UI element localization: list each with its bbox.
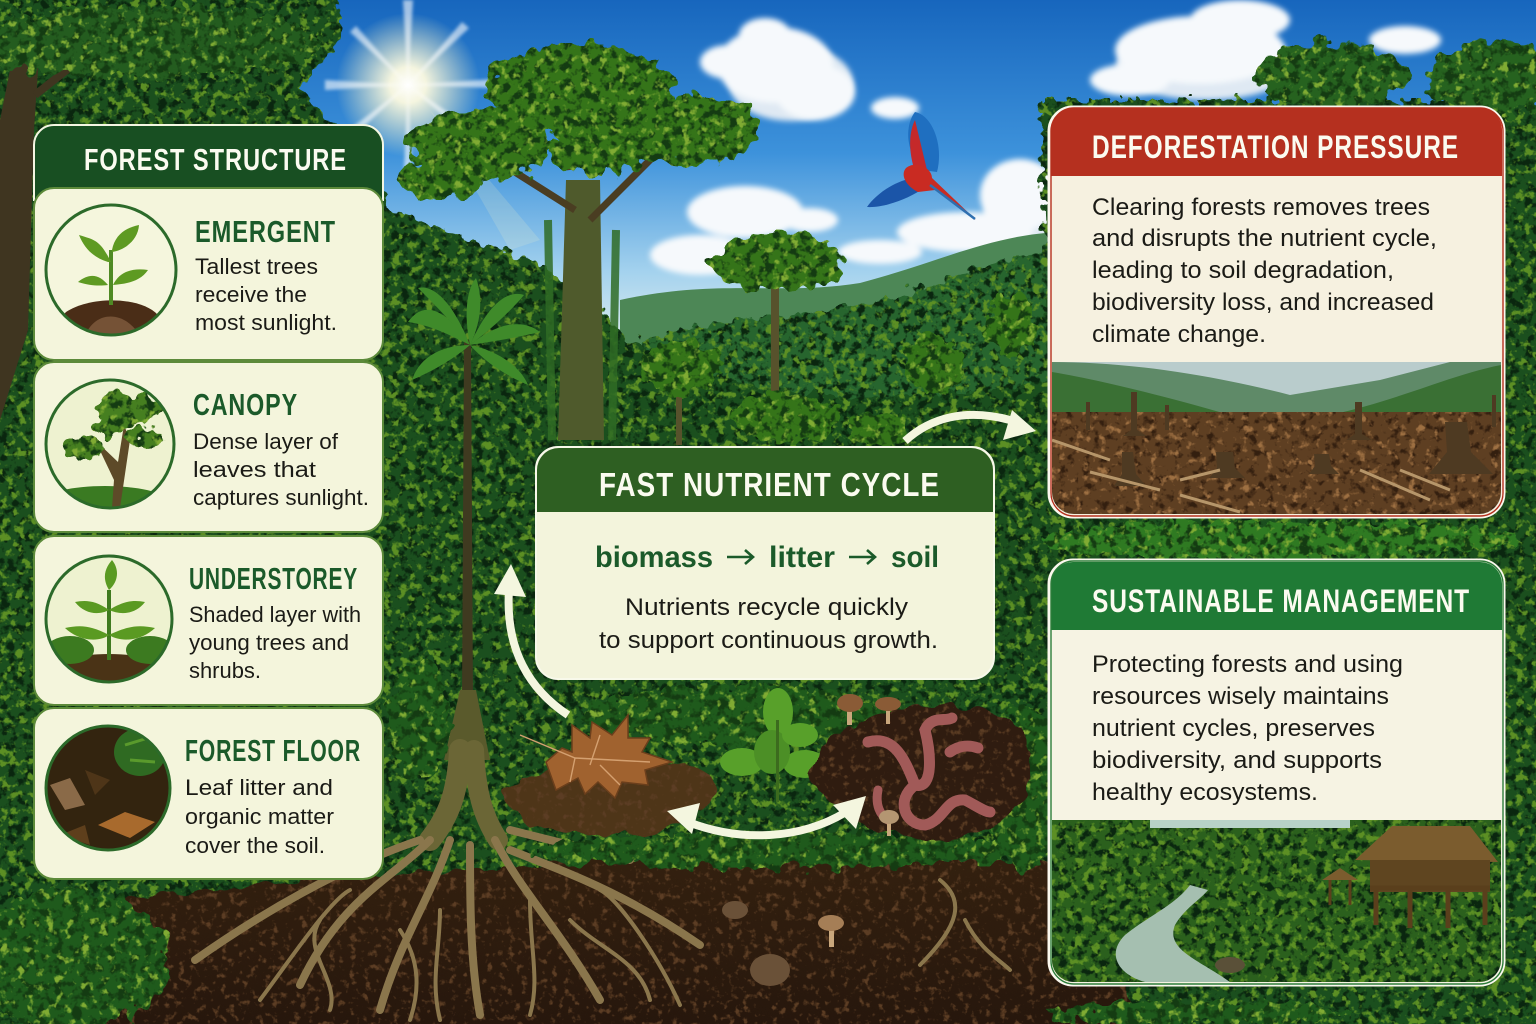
cycle description xyxy=(599,594,938,654)
sustainable text: biodiversity, and supports xyxy=(1092,747,1382,774)
tree roots xyxy=(195,750,1010,1020)
forest floor soil xyxy=(100,860,1130,1024)
deforestation text: climate change. xyxy=(1092,321,1266,348)
sun xyxy=(325,0,540,250)
cycle sequence: soil xyxy=(891,541,939,574)
canopy text: Dense layer of xyxy=(193,429,339,454)
clouds xyxy=(650,0,1441,275)
sustainable text xyxy=(1092,651,1403,806)
gap foliage between right panels xyxy=(1045,520,1525,560)
icon: mushrooms and stones xyxy=(722,694,901,986)
cycle sequence: biomass xyxy=(595,541,713,574)
sustainable text: healthy ecosystems. xyxy=(1092,779,1318,806)
heading: fast nutrient cycle: FAST NUTRIENT CYCLE xyxy=(599,466,940,503)
litter pile xyxy=(500,760,712,835)
canopy text: CANOPY xyxy=(193,387,298,422)
deforestation text xyxy=(1092,194,1437,348)
understorey text: shrubs. xyxy=(189,658,261,683)
icon: fallen leaf xyxy=(520,715,672,798)
panel: forest structure xyxy=(34,125,383,879)
heading: forest structure: FOREST STRUCTURE xyxy=(84,142,347,177)
panel: sustainable management xyxy=(1048,558,1506,986)
emergent text xyxy=(195,214,337,335)
forest floor text: FOREST FLOOR xyxy=(185,733,361,768)
icon: shrub circle xyxy=(46,556,174,690)
understorey text: Shaded layer with xyxy=(189,602,361,627)
deforestation text: and disrupts the nutrient cycle, xyxy=(1092,225,1437,252)
sustainable heading bar xyxy=(1051,562,1502,630)
mid-ground undergrowth xyxy=(0,660,1350,1024)
deforestation text: leading to soil degradation, xyxy=(1092,257,1394,284)
icon: tree circle xyxy=(45,380,174,514)
forest floor text xyxy=(185,733,361,858)
emergent text: receive the xyxy=(195,282,307,307)
forest floor text: Leaf litter and xyxy=(185,775,333,800)
forest floor text: cover the soil. xyxy=(185,833,325,858)
cycle description: Nutrients recycle quickly xyxy=(625,594,908,621)
cycle heading bar xyxy=(537,448,993,512)
canopy text xyxy=(193,387,369,510)
card: forest floor xyxy=(34,708,383,879)
icon: seedling xyxy=(720,688,827,802)
forest floor text: organic matter xyxy=(185,804,334,829)
forest structure heading bar xyxy=(34,125,383,200)
emergent text: EMERGENT xyxy=(195,214,336,249)
emergent text: most sunlight. xyxy=(195,310,337,335)
image: cleared forest xyxy=(1052,362,1501,514)
card: canopy xyxy=(34,362,383,532)
arrow: litter up to biomass xyxy=(494,564,568,715)
deforestation heading bar xyxy=(1051,108,1502,176)
big emergent tree xyxy=(400,44,758,440)
cycle sequence xyxy=(595,541,939,574)
emergent text: Tallest trees xyxy=(195,254,318,279)
understorey text: UNDERSTOREY xyxy=(189,561,358,596)
card: understorey xyxy=(34,536,383,705)
distant hills xyxy=(620,232,1060,480)
cycle description: to support continuous growth. xyxy=(599,627,938,654)
card: emergent xyxy=(34,188,383,360)
arrow: double headed litter and soil xyxy=(667,796,866,835)
canopy text: captures sunlight. xyxy=(193,485,369,510)
icon: earthworms xyxy=(868,718,990,825)
background: sky xyxy=(0,0,1536,340)
canopy text: leaves that xyxy=(193,457,316,482)
icon: seedling circle xyxy=(46,205,176,336)
parrot xyxy=(867,112,976,220)
sustainable text: nutrient cycles, preserves xyxy=(1092,715,1375,742)
icon: stilt hut xyxy=(1322,826,1498,928)
top left canopy and trunk xyxy=(0,6,320,420)
deforestation text: biodiversity loss, and increased xyxy=(1092,289,1434,316)
panel: fast nutrient cycle xyxy=(536,447,994,679)
soil mound xyxy=(810,705,1031,840)
small foreground trees xyxy=(640,232,1034,448)
panel: deforestation pressure xyxy=(1049,107,1504,517)
palm and main trunk xyxy=(408,278,540,760)
deforestation text: Clearing forests removes trees xyxy=(1092,194,1430,221)
arrow: biomass to deforestation xyxy=(905,410,1036,441)
understorey text xyxy=(189,561,361,683)
understorey text: young trees and xyxy=(189,630,349,655)
cycle sequence: litter xyxy=(769,541,835,574)
image: managed forest xyxy=(1052,820,1501,982)
sustainable text: resources wisely maintains xyxy=(1092,683,1389,710)
icon: leaf litter circle xyxy=(46,726,170,850)
sustainable text: Protecting forests and using xyxy=(1092,651,1403,678)
top right trees xyxy=(1254,40,1536,116)
